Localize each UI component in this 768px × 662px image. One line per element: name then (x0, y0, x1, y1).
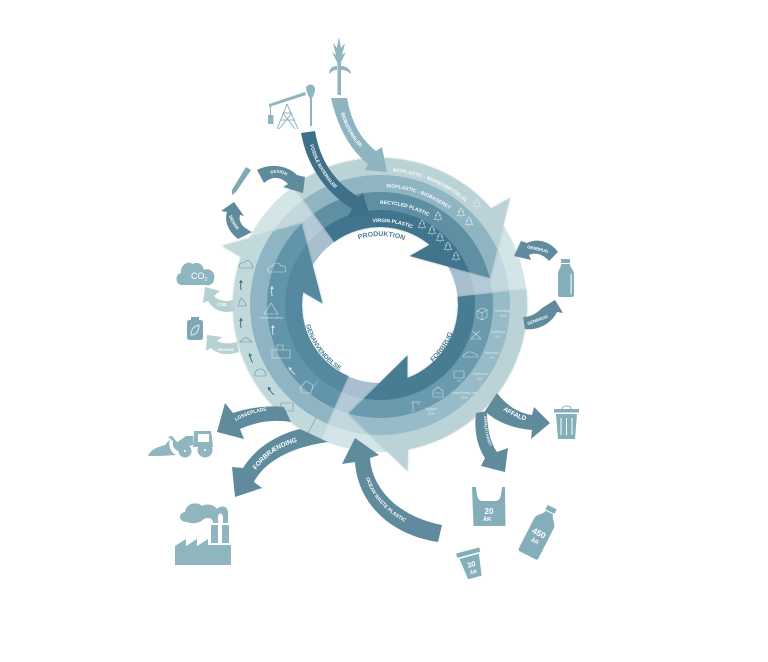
label: recycled plastic: RECYCLED PLASTIC (380, 200, 430, 216)
icon: cup 30 years: 30 (466, 559, 477, 570)
arrow: genbrug top (514, 241, 558, 261)
label: bioplastic bionedbrydelig: BIOPLASTIC - BIONEDBRYDELIG (393, 168, 467, 202)
icons and labels: forbrug sectors: 20% (461, 396, 467, 400)
icons and labels: forbrug sectors (411, 308, 511, 416)
arrow: affald: AFFALD (503, 407, 526, 420)
icon: bottle (558, 259, 574, 297)
arrow: biogas (206, 335, 239, 354)
heading: genanvendelse: GENANVENDELSE (306, 324, 342, 370)
icons and labels: forbrug sectors: Byggeri (425, 407, 437, 411)
icons: production trees (418, 199, 481, 261)
icon: bottle 450 years: 450 (530, 525, 548, 541)
arrow: design left: DESIGN (229, 215, 239, 230)
icon: oil pump (268, 84, 315, 129)
arrow: co2 (203, 287, 234, 312)
icons and labels: genanvendelse steps: Genanvendelse (259, 316, 283, 320)
icon: co2 cloud: 2 (204, 277, 208, 283)
icon: plastic bag 20 years: ÅR (483, 516, 491, 523)
arrow: genbrug bottom: GENBRUG (527, 314, 548, 326)
icon: factory (175, 503, 231, 565)
icons and labels: forbrug sectors: Elektronik (473, 372, 488, 376)
arrow: forbrænding (232, 429, 328, 497)
icons and labels: forbrug sectors: 9% (490, 356, 494, 360)
label: virgin plastic: VIRGIN PLASTIC (372, 218, 413, 228)
icon: cup 30 years: ÅR (469, 568, 478, 576)
icon: co2 cloud (176, 263, 214, 285)
icon: wheel loader (148, 431, 213, 458)
arrow: losseplads: LOSSEPLADS (234, 407, 266, 421)
panel: circular ring base (233, 158, 527, 452)
arrow: design top (257, 166, 305, 193)
icons and labels: forbrug sectors: 20% (428, 412, 434, 416)
arrow: losseplads (217, 403, 291, 439)
icon: plastic bag 20 years: 20 (485, 507, 494, 516)
icon: pencil (232, 167, 251, 195)
icon: gas tank (187, 317, 203, 340)
arrow: biomaterialer: BIOMATERIALER (341, 112, 362, 147)
heading: forbrug: FORBRUG (430, 332, 452, 362)
icons and labels: forbrug sectors: Landbrug (491, 330, 505, 334)
arrow: affald i havet (475, 411, 508, 472)
arrow: produktion ring segment (296, 157, 511, 279)
icon: sugarcane (329, 37, 351, 95)
icon: plastic bag 20 years (472, 487, 506, 526)
icon: bottle 450 years: ÅR (530, 537, 540, 546)
arrow: forbrug ring segment (348, 288, 528, 472)
icons and labels: forbrug sectors: Bilindustri (485, 351, 500, 355)
arrow: fossile materialer: FOSSILE MATERIALER (310, 144, 337, 188)
icons and labels: forbrug sectors: 40% (500, 314, 506, 318)
heading: produktion: PRODUKTION (358, 231, 406, 240)
arrow: ocean waste plastic (342, 438, 442, 542)
arrow: design top: DESIGN (270, 170, 288, 176)
icons and labels: forbrug sectors: Husholdning mm (451, 391, 477, 395)
icons and labels: forbrug sectors: Emballage (495, 309, 511, 313)
icon: cup 30 years (456, 547, 486, 581)
arrow: co2: CO2 (217, 302, 227, 307)
icons and labels: genanvendelse steps (238, 261, 318, 433)
arrow: genbrug top: GENBRUG (527, 244, 549, 254)
arrow: ocean waste plastic: OCEAN WASTE PLASTIC (366, 478, 406, 522)
arrow: biogas: BIOGAS (218, 347, 234, 352)
arrow: affald i havet: AFFALD I HAVET (484, 416, 492, 446)
icon: trash can (554, 406, 579, 439)
arrow: affald (485, 393, 550, 439)
arrow: genbrug bottom (523, 300, 563, 329)
arrow: genanvendelse ring segment (222, 222, 349, 439)
icon: bottle 450 years (518, 502, 562, 560)
label: bioplastic biobaseret: BIOPLASTIC - BIOBASERET (386, 184, 452, 209)
icons and labels: forbrug sectors: 3% (496, 335, 500, 339)
arrow: biomaterialer (331, 98, 387, 172)
arrow: design left (221, 202, 252, 239)
arrow: forbrænding: FORBRÆNDING (252, 438, 297, 470)
arrow: fossile materialer (301, 131, 368, 216)
icons and labels: forbrug sectors: 6% (478, 377, 482, 381)
icon: co2 cloud: CO (191, 271, 204, 281)
